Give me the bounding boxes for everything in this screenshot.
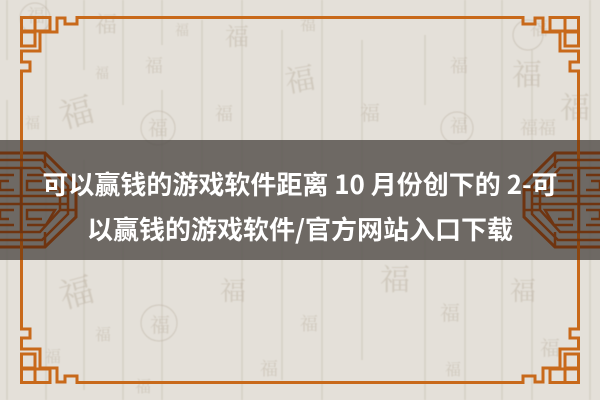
background: paper with faint characters: 福 [560,92,590,125]
background: paper with faint characters: 福 [25,115,40,132]
background: paper with faint characters: 福 [95,12,117,37]
background: paper with faint characters: 福 [445,361,461,379]
background: paper with faint characters: 福 [440,302,460,325]
left medallion [0,140,76,260]
background: paper with faint characters: 福 [540,337,560,360]
background: paper with faint characters: 福 [512,59,542,92]
background: paper with faint characters: 福 [260,359,278,379]
background: paper with faint characters: 福 [150,314,170,337]
background: paper with faint characters: 福 [95,326,111,344]
title: 可以赢钱的游戏软件距离 10 月份创下的 2-可以赢钱的游戏软件/官方网站入口下载 [42,165,558,247]
background: paper with faint characters: 福 [530,19,548,39]
background: paper with faint characters: 福 [145,56,163,76]
background: paper with faint characters: 福 [45,348,61,366]
bottom-right corner [300,200,578,382]
background: paper with faint characters: 福 [135,378,151,396]
background: paper with faint characters: 福 [215,104,233,124]
background: paper with faint characters: 福 [282,62,318,99]
background: paper with faint characters: 福 [450,116,468,136]
background: paper with faint characters: 福 [380,264,410,297]
background: paper with faint characters: 福 [225,24,249,51]
background: paper with faint characters: 福 [300,16,316,34]
top-left corner [22,18,300,200]
background: paper with faint characters: 福 [510,277,536,306]
background: paper with faint characters: 福 [300,314,318,334]
band: dark translucent title strip [0,140,600,260]
bottom-left corner [22,200,300,382]
background: paper with faint characters: 福 [56,92,98,136]
background: paper with faint characters: 福 [175,23,189,39]
background: paper with faint characters: 福 [450,56,468,76]
background: paper with faint characters: 福 [148,117,168,140]
background: paper with faint characters: 福福 [520,118,556,138]
background: paper with faint characters: 福 [27,6,45,26]
right medallion [524,140,600,260]
top-right corner [300,18,578,200]
background: paper with faint characters: 福 [95,66,109,82]
background: paper with faint characters: 福 [56,272,98,316]
background: paper with faint characters: 福 [360,102,380,125]
background: paper with faint characters: 福 [220,277,246,306]
